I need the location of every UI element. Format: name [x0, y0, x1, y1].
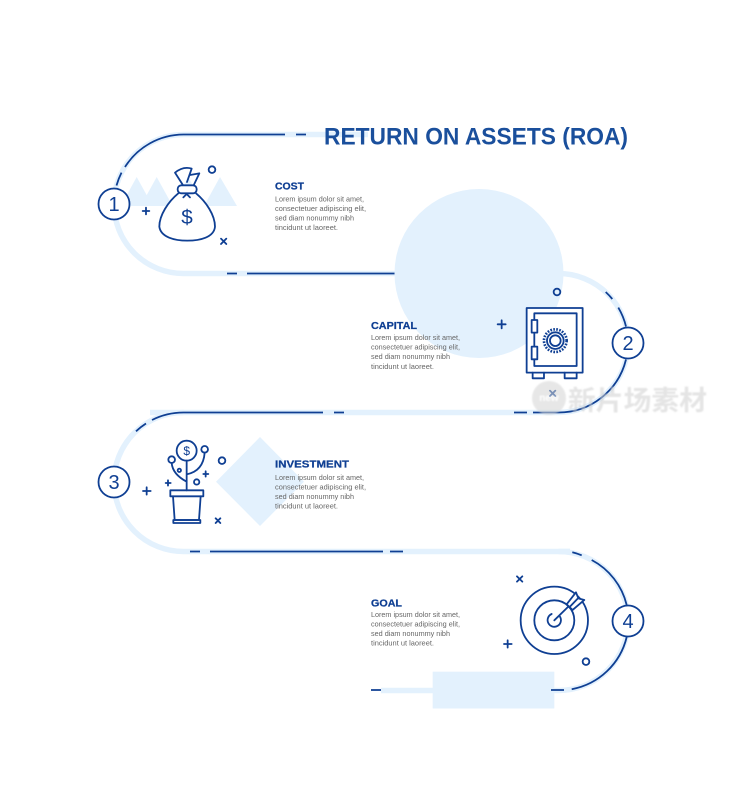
path segment 1	[114, 134, 440, 274]
text: investment: Lorem ipsum dolor sit amet,	[275, 473, 364, 482]
decorative rectangle	[433, 672, 554, 708]
text: cost: Lorem ipsum dolor sit amet,	[275, 195, 364, 204]
text: goal: Lorem ipsum dolor sit amet,	[371, 610, 460, 619]
number badge 1: 1	[108, 194, 120, 216]
watermark: new	[539, 393, 559, 404]
number badge 2: 2	[622, 333, 634, 355]
text: investment: INVESTMENT	[275, 458, 350, 470]
icon: money plant: $	[183, 444, 190, 458]
text: goal: tincidunt ut laoreet.	[371, 638, 434, 648]
number badge 1	[98, 188, 130, 220]
text: investment: sed diam nonummy nibh	[275, 492, 354, 501]
number badge 3: 3	[108, 472, 120, 494]
decorative diamond	[216, 437, 304, 526]
number badge 3	[98, 466, 130, 498]
icon: target with arrow	[504, 576, 589, 665]
number badge 4	[612, 606, 644, 636]
panel: step 3 investment	[98, 412, 570, 552]
panel: step 2 capital	[150, 189, 644, 412]
text: goal: sed diam nonummy nibh	[371, 629, 450, 638]
text: capital: Lorem ipsum dolor sit amet,	[371, 333, 460, 342]
icon: money bag: $	[181, 206, 193, 229]
text: capital	[371, 320, 460, 371]
decorative circle	[394, 189, 564, 358]
watermark: 新片场素材	[568, 386, 707, 416]
text: cost: COST	[275, 180, 305, 192]
path segment 2	[150, 274, 628, 412]
text: capital: CAPITAL	[371, 320, 418, 332]
text: cost: sed diam nonummy nibh	[275, 214, 354, 223]
text: goal: GOAL	[371, 598, 403, 610]
text: capital: consectetuer adipiscing elit,	[371, 343, 460, 352]
path segment 3	[114, 412, 570, 552]
icon: money plant	[143, 441, 225, 523]
text: goal	[371, 598, 460, 648]
text: capital: sed diam nonummy nibh	[371, 352, 450, 361]
text: capital: tincidunt ut laoreet.	[371, 362, 434, 371]
text: cost	[275, 180, 366, 232]
panel: step 4 goal	[371, 552, 644, 708]
path segment 4	[371, 552, 628, 690]
watermark	[532, 381, 707, 416]
text: cost: consectetuer adipiscing elit,	[275, 204, 366, 213]
text: cost: tincidunt ut laoreet.	[275, 223, 338, 232]
panel: step 1 cost	[98, 134, 440, 274]
title: RETURN ON ASSETS (ROA)	[324, 123, 628, 150]
text: goal: consectetuer adipiscing elit,	[371, 620, 460, 628]
icon: safe	[498, 289, 583, 396]
text: investment	[275, 458, 366, 510]
text: investment: tincidunt ut laoreet.	[275, 502, 338, 510]
number badge 2	[612, 328, 644, 358]
number badge 4: 4	[622, 611, 634, 633]
decorative triangles	[121, 177, 237, 206]
icon: money bag	[143, 166, 226, 244]
text: investment: consectetuer adipiscing elit,	[275, 482, 366, 492]
